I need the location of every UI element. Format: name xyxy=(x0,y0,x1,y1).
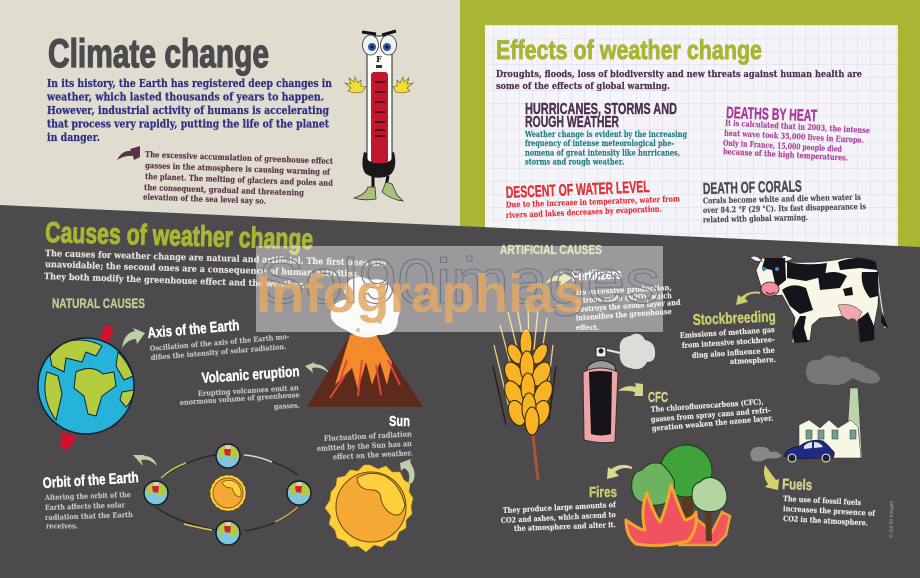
label: fertilizers: nitrous oxide (N2O), which xyxy=(576,291,672,305)
label: volcanic eruption: Erupting volcanoes emit an xyxy=(198,383,300,398)
causes intro: unavoidable; the second ones are a consequence of human activities. xyxy=(45,260,360,280)
icon: factory xyxy=(799,388,862,458)
label: axis of the earth xyxy=(147,317,290,362)
label: fertilizers: Its excessive production, xyxy=(576,283,672,297)
effects intro xyxy=(496,69,862,92)
label: fires: Fires xyxy=(589,484,617,501)
heading: artificial causes: ARTIFICIAL CAUSES xyxy=(500,242,602,257)
side text: The excessive accumulation of greenhouse effect xyxy=(145,149,333,166)
watermark: Infographias xyxy=(256,264,584,324)
intro text xyxy=(46,77,332,144)
panel: causes dark background xyxy=(0,205,920,578)
icon: sun xyxy=(325,465,413,552)
label: fires: the atmosphere and alter it. xyxy=(514,520,616,533)
arrow: axis xyxy=(122,328,145,348)
chart: earth orbit diagram xyxy=(144,444,311,545)
side text: the planet. The melting of glaciers and poles and xyxy=(145,171,334,188)
arrow: orbit xyxy=(133,455,157,466)
effect: hurricanes: nomena of great intensity like hurricanes, xyxy=(525,148,680,158)
label: fires: CO2 and ashes, which ascend to xyxy=(501,510,616,525)
label: orbit of the earth: radiation that the Earth xyxy=(45,510,134,522)
label: fertilizers xyxy=(571,265,682,332)
label: sun: Fluctuation of radiation xyxy=(324,429,412,443)
intro text: in danger. xyxy=(47,131,100,144)
label: cfc: The chlorofluorocarbons (CFC), xyxy=(651,397,764,414)
label: orbit of the earth: Earth affects the solar xyxy=(45,500,125,512)
label: fertilizers: destroys the ozone layer and xyxy=(576,298,682,314)
label: stockbreeding: atmosphere. xyxy=(730,355,776,366)
label: stockbreeding: Emissions of methane gas xyxy=(680,325,775,340)
label: fertilizers: effect. xyxy=(576,323,599,332)
label: fires xyxy=(501,484,617,533)
intro text: However, industrial activity of humans is accelerating xyxy=(47,104,329,117)
effect: death of corals: related with global warming. xyxy=(703,212,808,224)
effect: deaths by heat xyxy=(723,104,870,163)
label: fires: They produce large amounts of xyxy=(503,500,617,515)
label: axis of the earth: Oscillation of the axis of the Earth mo- xyxy=(149,332,290,353)
label: fuels xyxy=(782,476,876,527)
label: volcanic eruption: gasses. xyxy=(274,401,300,411)
arrow: volcano xyxy=(305,362,329,373)
label: fuels: The use of fossil fuels xyxy=(783,494,861,507)
causes intro: The causes for weather change are natural and artificial. The first ones are xyxy=(45,249,386,269)
label: cfc: gasses from spray cans and refri- xyxy=(650,406,771,424)
effect: death of corals: Corals become white and die when water is xyxy=(703,192,861,205)
panel: effects of weather change xyxy=(496,35,870,224)
icon: cow xyxy=(750,255,888,343)
label: cfc: CFC xyxy=(648,389,668,406)
icon: factory smoke xyxy=(806,355,880,385)
icon: car xyxy=(784,440,834,462)
icon: exhaust smoke xyxy=(750,447,782,462)
arrow: stockbreeding xyxy=(736,292,760,305)
effect: hurricanes: ROUGH WEATHER xyxy=(525,114,619,131)
label: orbit of the earth: receives. xyxy=(46,522,78,530)
label: fertilizers: Fertilizers xyxy=(571,265,622,284)
effect: hurricanes xyxy=(524,101,687,166)
label: fertilizers: intensifies the greenhouse xyxy=(576,307,672,322)
label: sun: emitted by the Sun has an xyxy=(317,439,412,453)
effect: deaths by heat: because of the high temperatures. xyxy=(723,146,848,163)
label: stockbreeding: from intensive stockbree- xyxy=(682,335,775,350)
label: axis of the earth: difies the intensity of solar radiation. xyxy=(150,342,287,362)
icon: burning trees xyxy=(626,445,730,545)
label: stockbreeding: Stockbreeding xyxy=(692,308,776,329)
icon: spray cloud xyxy=(620,334,655,369)
effect: deaths by heat: Only in France, 15,000 people died xyxy=(723,138,843,154)
effect: death of corals: DEATH OF CORALS xyxy=(703,178,802,198)
arrow: fuels xyxy=(764,465,779,490)
intro text: In its history, the Earth has registered deep changes in xyxy=(47,77,332,90)
icon: spray can xyxy=(583,347,625,443)
label: sun xyxy=(317,413,413,461)
heading: natural causes: NATURAL CAUSES xyxy=(52,295,145,311)
intro text: that process very rapidly, putting the life of the planet xyxy=(47,118,330,130)
label: sun: Sun xyxy=(389,413,410,430)
icon: volcano xyxy=(307,277,423,407)
label: orbit of the earth: Orbit of the Earth xyxy=(42,469,139,492)
effect: descent of water level xyxy=(505,178,680,220)
label: volcanic eruption: Volcanic eruption xyxy=(201,363,300,387)
effect: deaths by heat: heat wave took 35,000 lives in Europe. xyxy=(724,128,864,145)
label: stockbreeding: ding also influence the xyxy=(692,346,775,360)
copyright: © Sol 90 Images xyxy=(888,501,895,538)
icon: globe xyxy=(38,326,134,449)
watermark: Sol90images xyxy=(258,247,660,317)
arrow: cfc xyxy=(618,383,643,396)
label: orbit of the earth: Altering the orbit of the xyxy=(44,490,131,502)
effect: hurricanes: frequency of intense meteorological phe- xyxy=(525,138,674,148)
arrow: maroon xyxy=(117,146,140,160)
label: volcanic eruption: enormous volume of greenhouse xyxy=(180,390,300,407)
panel: causes of weather change xyxy=(38,217,895,552)
side text: the consequent, gradual and threatening xyxy=(144,182,305,198)
effects intro: Droughts, floods, loss of biodiversity and new threats against human health are xyxy=(496,69,862,80)
label: fuels: CO2 in the atmosphere. xyxy=(783,514,868,527)
effect: hurricanes: HURRICANES, STORMS AND xyxy=(525,101,677,118)
label: volcanic eruption xyxy=(180,363,300,411)
panel: effects grid sheet xyxy=(485,25,898,250)
label: sun: effect on the weather. xyxy=(333,448,413,461)
side text: elevation of the sea level say so. xyxy=(143,192,266,206)
label: cfc xyxy=(648,389,774,433)
title: Effects of weather change xyxy=(496,35,762,65)
effect: descent of water level: rivers and lakes decreases by evaporation. xyxy=(506,203,662,220)
effect: hurricanes: Weather change is evident by the increasing xyxy=(524,129,687,139)
effect: death of corals: over 84.2 °F (29 °C). Its fast disappearance is xyxy=(703,201,866,215)
panel: climate change xyxy=(46,31,413,206)
causes intro: They both modify the greenhouse effect and the weather. xyxy=(44,272,305,291)
causes intro xyxy=(44,249,386,291)
title: Climate change xyxy=(48,32,269,76)
label: orbit of the earth xyxy=(42,469,139,530)
panel: effects green background xyxy=(460,0,920,260)
arrow: fertilizers xyxy=(545,271,572,286)
arrow: sun xyxy=(400,459,415,484)
effects intro: some of the effects of global warming. xyxy=(496,81,670,92)
label: stockbreeding xyxy=(680,308,776,366)
side text xyxy=(143,149,334,206)
effect: hurricanes: storms and rough weather. xyxy=(525,156,624,166)
label: fuels: increases the presence of xyxy=(783,504,876,518)
label: cfc: geration weaken the ozone layer. xyxy=(651,413,774,433)
effect: death of corals xyxy=(703,178,866,224)
icon: thermometer character xyxy=(345,31,413,201)
arrow: fires xyxy=(607,465,632,479)
label: fuels: Fuels xyxy=(782,476,812,494)
icon: wheat xyxy=(493,306,556,480)
effect: deaths by heat: It is calculated that in 2003, the intense xyxy=(725,118,870,135)
side text: gasses in the atmosphere is causing warming of xyxy=(145,160,331,177)
effect: deaths by heat: DEATHS BY HEAT xyxy=(726,104,817,125)
panel: climate change background xyxy=(0,0,460,240)
icon: thermometer character: F xyxy=(376,54,382,64)
title: Causes of weather change xyxy=(45,217,314,256)
label: axis of the earth: Axis of the Earth xyxy=(147,317,240,342)
effect: descent of water level: DESCENT OF WATER LEVEL xyxy=(505,178,650,202)
effect: descent of water level: Due to the increase in temperature, water from xyxy=(506,193,680,209)
intro text: weather, which lasted thousands of years to happen. xyxy=(46,90,324,104)
